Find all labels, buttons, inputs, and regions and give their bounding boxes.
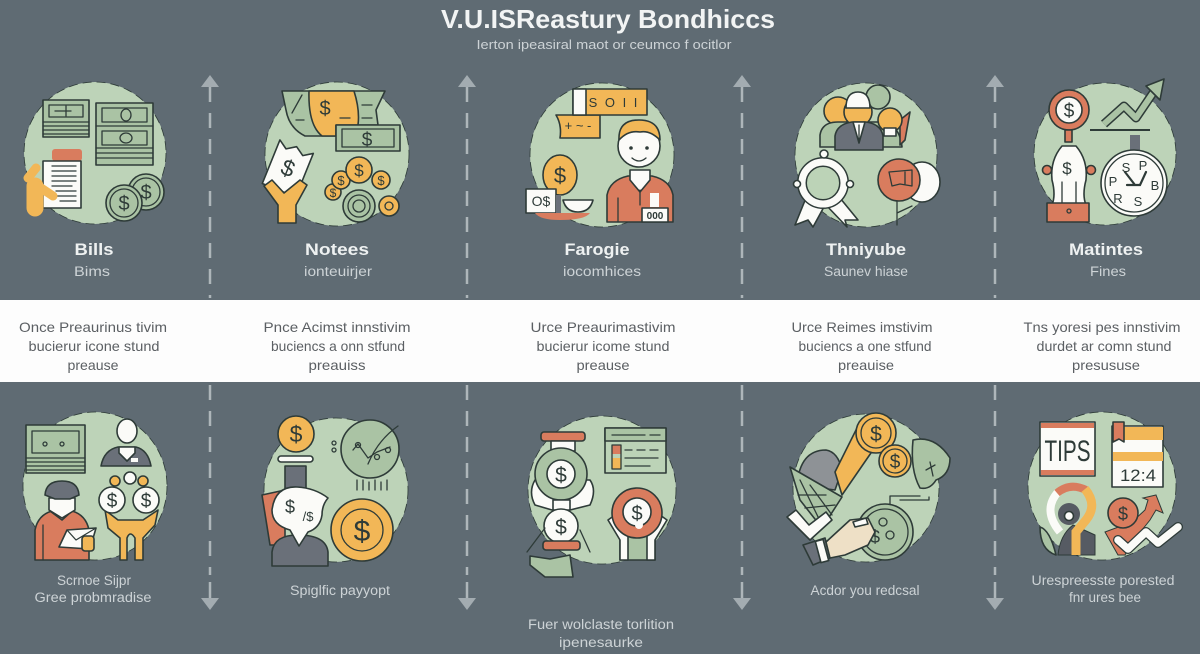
pillar: $ xyxy=(1062,159,1072,178)
TIPS card xyxy=(1040,422,1095,476)
coins: $ xyxy=(337,173,345,188)
icon: coin pedestal and chart xyxy=(262,416,408,566)
caption 1 xyxy=(34,573,152,605)
label: Matintes: Matintes xyxy=(1069,240,1143,259)
dollar dial: $ xyxy=(1064,101,1075,122)
clock: P xyxy=(1109,174,1117,189)
coin on pedestal xyxy=(278,416,314,490)
icon: coins, graph and hand xyxy=(787,413,950,565)
coins: $ xyxy=(118,193,130,215)
subtitle: Ierton ipeasiral maot or ceumco f ocitlor xyxy=(476,37,732,52)
arrow: divider 4 xyxy=(986,75,1004,610)
customer xyxy=(35,481,96,560)
banknote xyxy=(336,125,400,151)
receipt xyxy=(262,140,313,197)
sublabel: Bills: Bims xyxy=(74,264,110,279)
icon: bills xyxy=(24,82,166,224)
person xyxy=(607,120,673,222)
arrow: divider 3 xyxy=(733,75,751,610)
coins: $ xyxy=(140,182,152,204)
pillar xyxy=(1042,130,1096,222)
ribbon medal xyxy=(794,150,858,227)
advisor xyxy=(101,419,151,466)
coins xyxy=(856,413,911,477)
large coin xyxy=(331,499,393,561)
sign: + ~ - xyxy=(565,118,591,133)
white check xyxy=(787,510,832,540)
title: V.U.ISReastury Bondhiccs xyxy=(441,4,775,34)
yellow arm xyxy=(835,430,873,495)
label box: O$ xyxy=(532,193,551,209)
TIPS card: TIPS xyxy=(1044,435,1090,468)
coin column xyxy=(527,432,594,577)
coin in hands xyxy=(608,488,667,560)
band text: column 4: preauise xyxy=(838,357,894,373)
coin column: $ xyxy=(555,516,567,539)
clock: P xyxy=(1139,158,1147,173)
dial: $ xyxy=(870,527,880,547)
speech bubble person: $ xyxy=(285,497,295,517)
label: Thniyube: Thniyube xyxy=(826,240,906,259)
icon: maturity gauge and clock xyxy=(1034,79,1176,225)
band text: column 5: Tns yoresi pes innstivim xyxy=(1024,319,1180,335)
dollar dial xyxy=(1049,90,1089,130)
band text: column 3: preause xyxy=(576,357,630,373)
green grid panel xyxy=(790,467,842,528)
caption 5 xyxy=(1032,573,1174,605)
tick and slider xyxy=(890,496,929,505)
band text: column 4: Urce Reimes imstivim xyxy=(792,319,932,335)
coins xyxy=(325,157,399,222)
coin column: $ xyxy=(555,464,567,487)
band text: column 4: buciencs a one stfund xyxy=(798,338,932,354)
caption 5: fnr ures bee xyxy=(1069,590,1141,605)
speech bubble person xyxy=(262,487,328,566)
white description band xyxy=(0,300,1200,382)
band text: column 4 xyxy=(792,319,932,373)
icon: person with coin xyxy=(526,83,674,227)
label: Farogie: Farogie xyxy=(564,240,630,259)
arrow: divider 1 xyxy=(201,75,219,610)
sublabel: Farogie: iocomhices xyxy=(563,264,641,279)
caption 5: Urespreesste porested xyxy=(1032,573,1174,588)
calendar xyxy=(1112,422,1163,487)
hand with cuff xyxy=(803,518,875,565)
speech bubble person: /$ xyxy=(303,509,314,524)
caption 3 xyxy=(528,617,674,650)
large coin: $ xyxy=(354,515,371,548)
band text: column 1: preause xyxy=(68,357,119,373)
sublabel: Matintes: Fines xyxy=(1090,264,1126,279)
money bag xyxy=(912,439,950,488)
banknote stack xyxy=(26,425,85,473)
speech circles xyxy=(878,159,940,225)
coin on pedestal: $ xyxy=(290,421,303,447)
sublabel: Notes: ionteuirjer xyxy=(304,264,373,279)
band text: column 3: bucierur icome stund xyxy=(536,338,670,354)
band text: column 5: durdet ar comn stund xyxy=(1036,338,1172,354)
band text: column 1 xyxy=(19,319,167,373)
clock: S xyxy=(1122,160,1131,175)
icon: bill and people xyxy=(23,412,167,560)
rising arrow xyxy=(1090,79,1164,130)
person: 000 xyxy=(647,211,664,222)
coin and arrow xyxy=(1105,495,1178,555)
coin bubble xyxy=(543,155,577,195)
band text: column 2 xyxy=(264,319,410,373)
band text: column 1: bucierur icone stund xyxy=(28,338,160,354)
dial xyxy=(857,504,913,560)
bowl xyxy=(535,195,593,220)
band text: column 3: Urce Preaurimastivim xyxy=(530,319,676,335)
wavy banknote: $ xyxy=(319,98,331,120)
coins: $ xyxy=(377,173,385,188)
band text: column 2: preauiss xyxy=(308,357,366,373)
clock: R xyxy=(1113,191,1123,206)
chart disc xyxy=(332,420,399,490)
icon: coins held by hands xyxy=(527,416,676,577)
coin bubble: $ xyxy=(554,163,566,188)
band text: column 2: buciencs a onn stfund xyxy=(271,338,405,354)
band text: column 1: Once Preaurinus tivim xyxy=(19,319,167,335)
wavy banknote xyxy=(282,91,385,136)
caption 3: ipenesaurke xyxy=(559,635,643,650)
clock: B xyxy=(1151,178,1159,193)
ring with figure xyxy=(1040,487,1095,555)
coin in hands: $ xyxy=(631,503,643,525)
coins xyxy=(106,174,164,221)
bill stack left xyxy=(43,100,89,137)
hand xyxy=(264,180,307,223)
yellow figure with coin bags: $ xyxy=(107,491,118,512)
banknote: $ xyxy=(362,130,373,151)
yellow figure with coin bags xyxy=(99,472,159,560)
coin and arrow: $ xyxy=(1118,504,1128,524)
coins: $ xyxy=(890,452,901,473)
bill stack right xyxy=(96,103,153,165)
label: Bills: Bills xyxy=(74,240,114,259)
document xyxy=(43,149,82,208)
band text: column 3 xyxy=(530,319,676,373)
icon: notes xyxy=(262,82,409,226)
label box xyxy=(526,189,556,213)
coins: $ xyxy=(330,186,337,200)
hand xyxy=(28,168,53,208)
arrow: divider 2 xyxy=(458,75,476,610)
yellow figure with coin bags: $ xyxy=(141,491,152,512)
icon: TIPS xyxy=(1028,412,1178,560)
calendar: 12:4 xyxy=(1120,466,1156,485)
receipt: $ xyxy=(277,154,299,183)
band text: column 5: presususe xyxy=(1072,357,1140,373)
sign xyxy=(556,89,647,138)
sublabel: Thniyube: Saunev hiase xyxy=(824,264,908,279)
coins: $ xyxy=(354,161,364,180)
caption 1: Gree probmradise xyxy=(34,590,152,605)
band text: column 5 xyxy=(1024,319,1180,373)
gray dome xyxy=(797,450,842,490)
band text: column 2: Pnce Acimst innstivim xyxy=(264,319,410,335)
sign: S O I I xyxy=(589,95,639,110)
team xyxy=(820,85,910,150)
caption 2: Spiglfic payyopt xyxy=(290,583,390,598)
caption 4: Acdor you redcsal xyxy=(810,583,920,598)
clock xyxy=(1101,135,1167,216)
coins: $ xyxy=(870,423,882,446)
clock: S xyxy=(1134,194,1143,209)
label: Notes: Notees xyxy=(305,240,369,259)
icon: people and award xyxy=(794,83,940,227)
caption 1: Scrnoe Sijpr xyxy=(57,573,131,588)
browser panel xyxy=(605,428,666,473)
caption 3: Fuer wolclaste torlition xyxy=(528,617,674,632)
